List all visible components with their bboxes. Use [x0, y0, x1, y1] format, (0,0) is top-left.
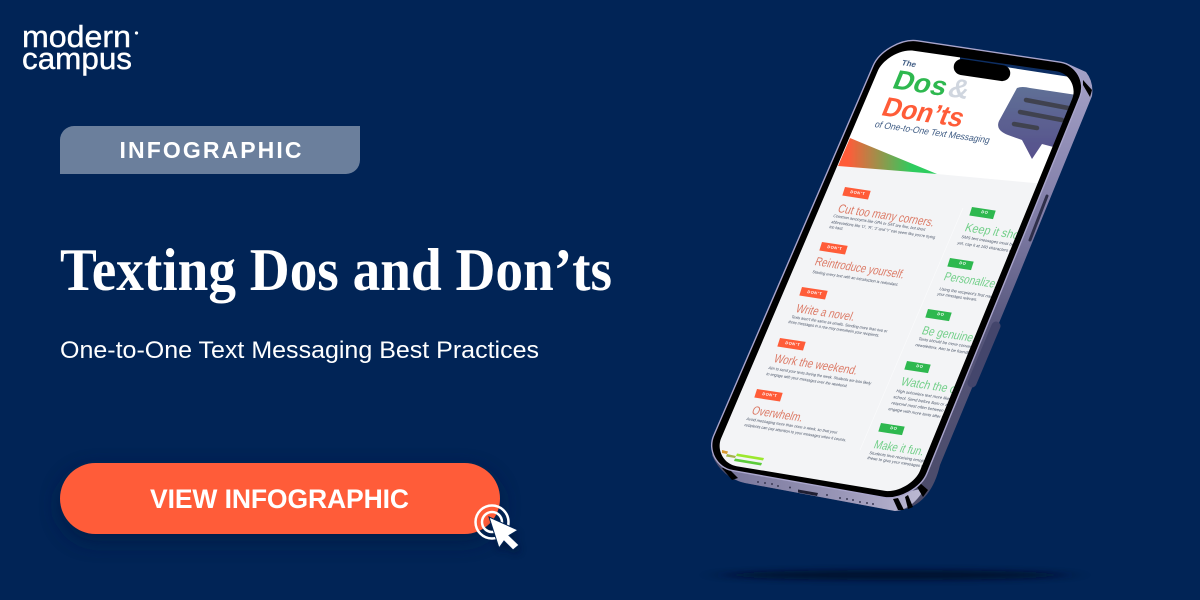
item: overwhelm: DON’T — [762, 391, 778, 398]
footer stripes — [722, 450, 764, 466]
speaker and port — [757, 481, 874, 505]
tag: infographic: INFOGRAPHIC — [120, 137, 302, 163]
item: keep it short: Keep it short. — [963, 221, 1031, 243]
icon: click cursor — [476, 506, 520, 553]
item: cut too many corners: too hard. — [829, 224, 844, 231]
heading: ampersand: & — [944, 73, 975, 105]
item: watch the clock: respond most often between 5pm — [891, 400, 954, 414]
item: write a novel: Write a novel. — [794, 302, 857, 324]
item: personalize — [936, 258, 996, 301]
heading: don'ts: Don’ts — [878, 92, 970, 133]
item: reintroduce yourself: Starting every text with an introduction is redundant. — [812, 269, 899, 287]
item: make it fun: Make it fun. — [872, 438, 927, 458]
title: Texting Dos and Don’ts — [60, 237, 612, 303]
item: overwhelm: Overwhelm. — [750, 404, 806, 424]
item: make it fun — [868, 423, 924, 468]
side buttons — [972, 196, 1047, 383]
phone shadow — [725, 570, 1065, 580]
item: personalize: your messages relevant. — [937, 291, 978, 302]
item: cut too many corners: Cut too many corners. — [836, 202, 937, 229]
item: overwhelm: recipients can pay attention to your messages when it counts. — [744, 422, 847, 442]
item: be genuine: newsletters. Aim to be friendly — [915, 342, 972, 355]
item: keep it short — [956, 207, 1018, 252]
item: cut too many corners: DON’T — [850, 189, 866, 196]
item: personalize: Using the recipient’s first name in — [939, 286, 1002, 300]
item: cut too many corners — [829, 187, 937, 240]
item: watch the clock: school. Send before 8am or after — [893, 394, 955, 408]
item: watch the clock: Watch the clock. — [899, 375, 979, 399]
item: watch the clock: DO — [916, 363, 924, 369]
item: write a novel: Texts aren’t the same as emails. Sending more than two or — [791, 314, 889, 334]
screen white header — [830, 50, 1074, 184]
logo: modern campus — [22, 19, 138, 76]
item: write a novel: three messages in a row may overwhelm your recipients. — [788, 319, 880, 338]
antenna bands — [722, 80, 1092, 510]
logo: modern campus: campus — [22, 41, 132, 76]
item: be genuine: Be genuine. — [920, 324, 979, 345]
item: reintroduce yourself: DON’T — [827, 244, 843, 251]
item: be genuine: DO — [937, 311, 945, 317]
button: view infographic: VIEW INFOGRAPHIC — [150, 484, 409, 514]
item: write a novel: DON’T — [807, 289, 823, 296]
item: work the weekend: DON’T — [785, 340, 801, 347]
item: write a novel — [788, 287, 889, 338]
phone bottom face — [722, 466, 925, 511]
phone bezel — [712, 40, 1082, 498]
gradient wedge — [838, 138, 937, 174]
item: overwhelm — [744, 389, 847, 442]
item: work the weekend: Aim to send your texts during the week. Students are less likely — [768, 365, 873, 386]
item: watch the clock: High schoolers text more likely after — [896, 388, 964, 403]
item: keep it short: yet, cap it at 160 characters max — [957, 240, 1019, 254]
logo: modern campus: modern — [22, 19, 131, 54]
notch — [953, 58, 1011, 82]
item: cut too many corners: Common acronyms like GPA or SAT are fine, but short — [833, 213, 927, 232]
item: watch the clock: engage with more texts after 5pm — [888, 406, 951, 420]
tag: infographic — [60, 126, 360, 174]
item: make it fun: these to give your messages some — [867, 455, 933, 470]
item: work the weekend: to engage with your messages over the weekend. — [766, 371, 849, 388]
heading: the: The — [900, 59, 918, 69]
item: reintroduce yourself — [812, 242, 907, 287]
item: watch the clock — [888, 361, 954, 418]
phone — [690, 40, 1100, 511]
item: keep it short: DO — [981, 209, 989, 215]
item: make it fun: Students love receiving emojis, use — [869, 450, 936, 465]
item: personalize: DO — [959, 260, 967, 266]
item: personalize: Personalize. — [942, 270, 1001, 291]
screen — [720, 50, 1074, 492]
item: be genuine — [915, 309, 974, 354]
item: work the weekend: Work the weekend. — [772, 352, 860, 377]
subtitle: One-to-One Text Messaging Best Practices — [60, 337, 539, 364]
item: keep it short: SMS text messages must be brief — [961, 234, 1025, 248]
item: be genuine: Texts should be more conversational than — [918, 336, 996, 353]
item: work the weekend — [766, 338, 873, 388]
subheading: of One-to-One Text Messaging — [873, 120, 992, 146]
screen gray panel — [720, 166, 1038, 491]
screen top navy strip — [960, 57, 1068, 77]
phone body side — [712, 63, 1092, 511]
item: overwhelm: Avoid messaging more than once a week, so that your — [746, 416, 839, 435]
item: make it fun: DO — [890, 425, 898, 431]
icon: chat bubble — [998, 87, 1074, 159]
heading: dos: Dos — [889, 65, 953, 102]
column divider — [860, 208, 963, 450]
item: reintroduce yourself: Reintroduce yourself. — [813, 255, 907, 281]
button: view infographic — [60, 463, 500, 541]
item: cut too many corners: abbreviations like ‘U’, ‘R’, ‘2’ and ‘Y’ can seem like you’re trying — [831, 219, 937, 240]
